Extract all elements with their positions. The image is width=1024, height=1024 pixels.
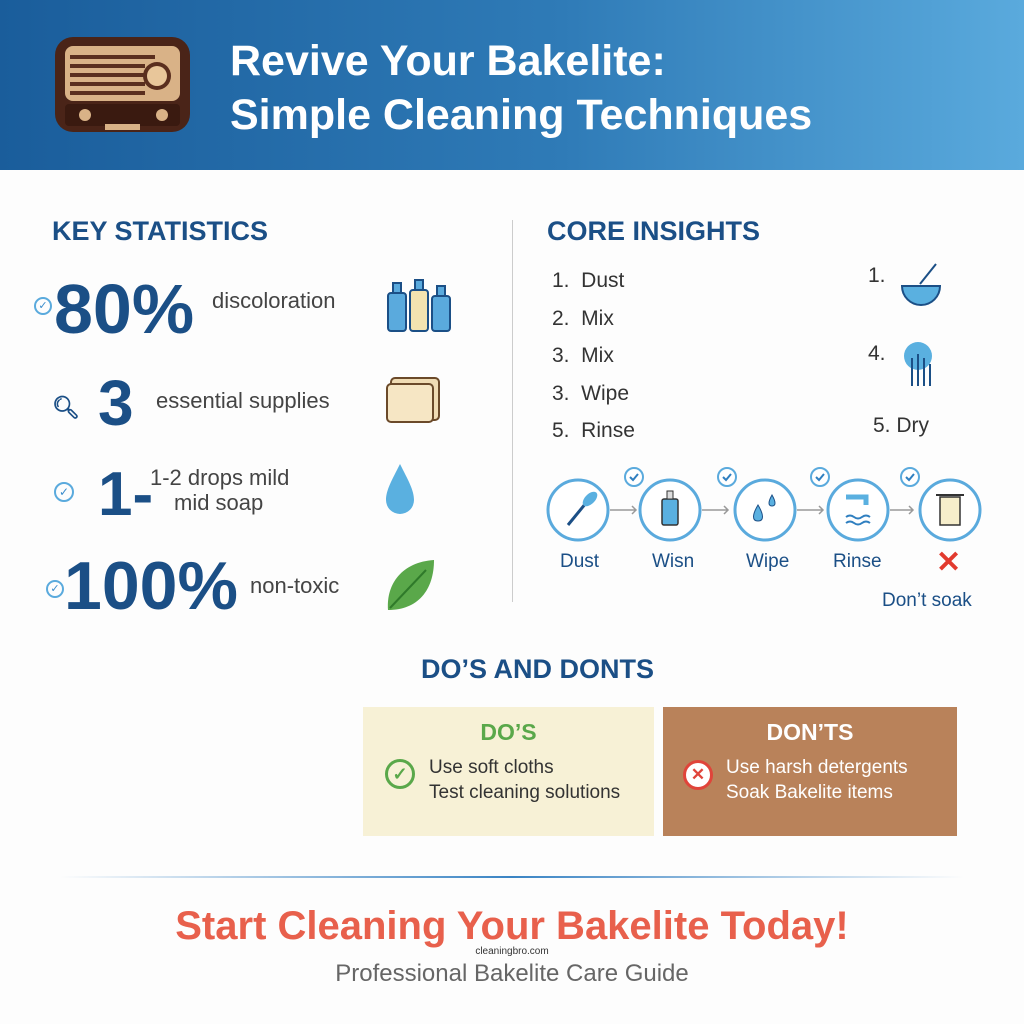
process flow: Don’t soak xyxy=(882,590,972,611)
heading: core insights: CORE INSIGHTS xyxy=(547,216,760,246)
icon: bottles xyxy=(387,279,451,332)
title: Revive Your Bakelite: xyxy=(230,37,666,85)
steps list: 1. Dust xyxy=(552,269,624,292)
panel: key statistics xyxy=(34,216,451,624)
icon: radio xyxy=(55,37,190,132)
panel: don'ts: Use harsh detergents xyxy=(726,757,908,778)
subtitle: Professional Bakelite Care Guide xyxy=(335,960,689,987)
panel: do's xyxy=(363,707,654,836)
icon: cloth xyxy=(386,377,440,423)
title: Simple Cleaning Techniques xyxy=(230,91,812,139)
source text: cleaningbro.com xyxy=(475,946,549,957)
stat: 100% xyxy=(46,548,434,624)
stat: drops of soap: 1-2 drops mild xyxy=(150,465,289,490)
stat: drops of soap: ✓ xyxy=(59,485,69,499)
stat: 3 supplies: essential supplies xyxy=(156,388,330,413)
stat: 3 supplies: 3 xyxy=(98,367,134,439)
title xyxy=(230,37,812,139)
heading: key statistics: KEY STATISTICS xyxy=(52,216,268,246)
steps list: 2. Mix xyxy=(552,306,614,330)
stat: drops of soap xyxy=(54,460,414,529)
icon: red x: ✕ xyxy=(936,546,961,579)
call to action: Start Cleaning Your Bakelite Today! xyxy=(175,904,849,948)
icon list right: 1. xyxy=(868,264,886,287)
icon list right: 4. xyxy=(868,342,886,365)
process flow xyxy=(546,467,982,611)
stat: 80%: discoloration xyxy=(212,288,336,313)
stat: 100%: 100% xyxy=(64,548,238,624)
panel: do's: Test cleaning solutions xyxy=(429,782,620,803)
icon list right xyxy=(868,263,941,437)
steps list: 3. Mix xyxy=(552,344,614,367)
panel: do's: ✓ xyxy=(392,764,408,784)
panel: don'ts: ✕ xyxy=(691,765,705,784)
steps list xyxy=(552,269,635,442)
process flow: Dust xyxy=(560,551,599,572)
process flow: Rinse xyxy=(833,551,882,572)
panel: do's: Use soft cloths xyxy=(429,757,554,778)
stat: 80% xyxy=(34,270,451,348)
stat: 80%: 80% xyxy=(54,270,194,348)
panel: core insights xyxy=(546,216,982,611)
stat: 100%: ✓ xyxy=(50,583,60,595)
panel: don'ts: Soak Bakelite items xyxy=(726,782,893,803)
stat: 100%: non-toxic xyxy=(250,573,339,598)
panel: don'ts: DON’TS xyxy=(767,719,853,745)
header banner xyxy=(0,0,1024,170)
icon list right: 5. Dry xyxy=(873,414,929,437)
stat: 3 supplies xyxy=(52,367,440,439)
stat: 3 supplies: 🔍︎ xyxy=(52,395,80,420)
steps list: 5. Rinse xyxy=(552,419,635,442)
stat: 80%: ✓ xyxy=(38,300,48,312)
steps list: 3. Wipe xyxy=(552,382,629,404)
process flow: Wisn xyxy=(652,551,694,572)
panel: don'ts xyxy=(663,707,957,836)
panel: do's: DO’S xyxy=(480,719,537,745)
icon: leaf xyxy=(388,560,434,610)
stat: drops of soap: mid soap xyxy=(174,490,263,515)
heading: do's and donts: DO’S AND DONTS xyxy=(421,654,654,684)
icon: water drop xyxy=(386,464,414,514)
process flow: Wipe xyxy=(746,551,789,572)
stat: drops of soap: 1- xyxy=(98,460,153,529)
